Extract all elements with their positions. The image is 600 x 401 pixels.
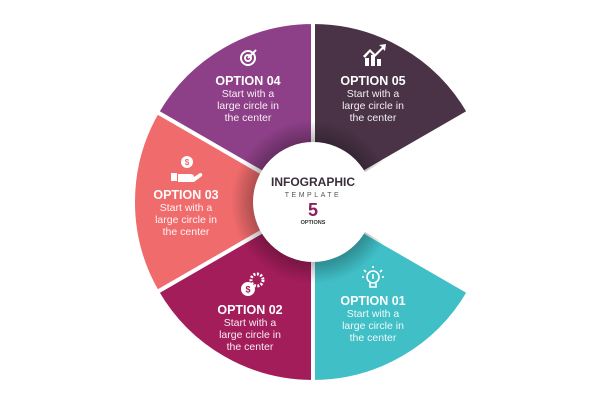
option 04 text: OPTION 04 [215,74,281,88]
option 03 text: large circle in [155,214,217,226]
option 04 text [215,50,281,124]
option 01 text: large circle in [342,320,404,332]
segment: option 02 [157,202,313,382]
icon: light bulb [362,266,384,287]
center circle [253,142,373,262]
option 04 text: the center [225,112,272,124]
option 02 text [217,274,283,353]
center title: INFOGRAPHIC [271,175,355,189]
center shadow ring [234,122,382,282]
option 03 text [153,156,219,238]
icon: growth chart [363,44,386,66]
option 05 text: Start with a [347,88,399,100]
option 02 text: Start with a [224,317,276,329]
option 05 text: OPTION 05 [340,74,406,88]
icon: target [241,50,256,65]
center options: OPTIONS [301,220,326,226]
option 05 text: the center [350,112,397,124]
option 03 text: Start with a [160,202,212,214]
option 02 text: OPTION 02 [217,303,283,317]
segment: option 05 [313,22,469,202]
option 01 text [340,266,406,344]
option 01 text: the center [350,332,397,344]
option 04 text: large circle in [217,100,279,112]
option 01 text: OPTION 01 [340,294,406,308]
segment: option 01 [313,202,469,382]
option 03 text: $ [185,158,190,167]
option 04 text: Start with a [222,88,274,100]
option 05 text: large circle in [342,100,404,112]
segment: option 03 [133,112,313,292]
option 02 text: large circle in [219,329,281,341]
option 03 text: OPTION 03 [153,188,219,202]
icon: hand with coin [171,156,202,182]
icon: coin with gear: $ [245,284,251,294]
segment: option 04 [157,22,313,202]
option 02 text: the center [227,341,274,353]
center subtitle: TEMPLATE [285,192,341,199]
option 01 text: Start with a [347,308,399,320]
option 05 text [340,44,406,124]
center number: 5 [308,200,318,220]
option 03 text: the center [163,226,210,238]
